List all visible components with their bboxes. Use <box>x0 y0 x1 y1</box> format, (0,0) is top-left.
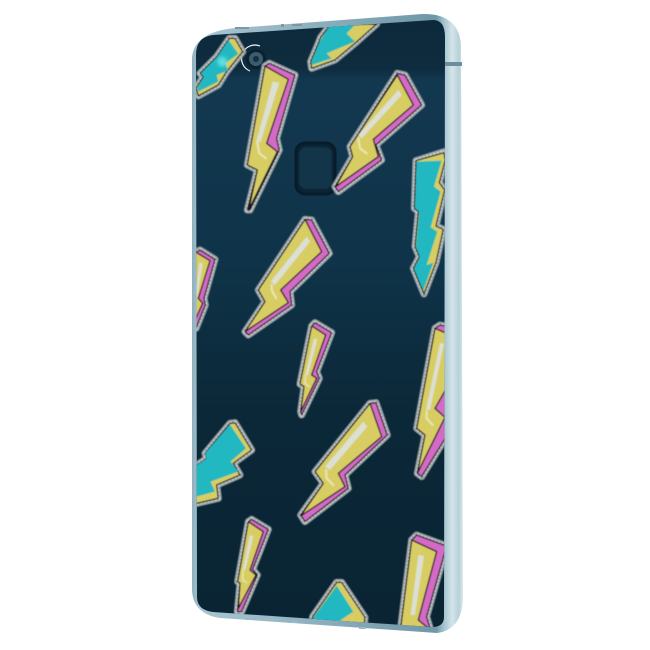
bolt: yellow bottom right <box>400 535 447 633</box>
bolt: yellow centre large <box>245 219 329 335</box>
bolt: partial left edge <box>190 250 215 328</box>
sticker set <box>190 24 448 633</box>
sticker bolts <box>190 24 448 633</box>
bolt: teal top centre <box>311 24 377 68</box>
bolt: yellow centre small <box>300 323 332 415</box>
dark phone back <box>196 20 445 627</box>
bolt: yellow upper-right <box>335 73 422 192</box>
bolt: teal right edge <box>413 152 445 294</box>
phone case illustration <box>192 14 463 633</box>
side button on rim <box>445 62 462 66</box>
bolt: teal bottom <box>310 582 365 633</box>
bolt: teal top-left <box>196 38 243 96</box>
top edge ports <box>235 24 302 29</box>
bolt: yellow right edge <box>417 325 448 477</box>
camera lens <box>242 45 266 71</box>
bolt: yellow upper-left <box>247 63 295 210</box>
bottom edge ports <box>246 618 366 629</box>
fingerprint sensor <box>296 143 335 194</box>
bolt: teal lower left <box>190 423 252 505</box>
phone case rim <box>192 14 463 633</box>
bolt: yellow lower centre <box>301 403 387 522</box>
bolt: yellow lower left small <box>237 519 268 612</box>
